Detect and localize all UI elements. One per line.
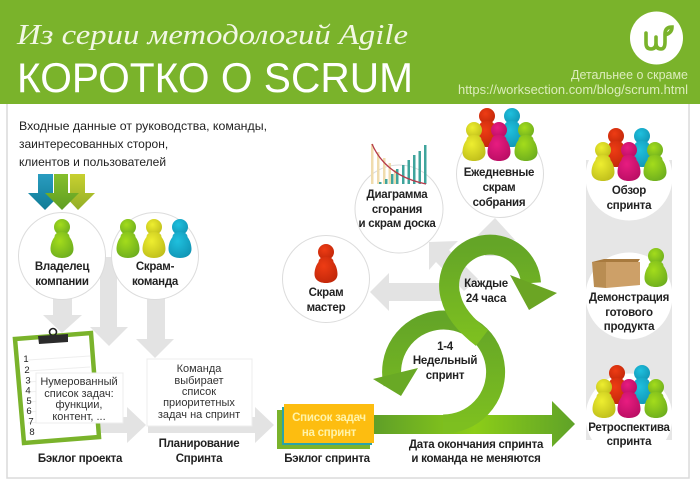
demo label: продукта (604, 321, 655, 333)
daily label: Ежедневные (464, 167, 534, 179)
label: fixed date: Дата окончания спринта (409, 439, 544, 451)
icon: scrum master (314, 244, 338, 283)
owner label: Владелец (35, 261, 89, 273)
intro text: клиентов и пользователей (19, 155, 166, 169)
daily label: скрам (483, 182, 515, 194)
scrum team circle (112, 212, 198, 300)
numbered lines: 1 (23, 354, 29, 365)
scrum master label: Скрам (309, 287, 343, 299)
retro label: спринта (607, 436, 652, 448)
scrum master circle (282, 236, 370, 322)
arrow: team to planning (136, 295, 174, 358)
arrow: lower loop (373, 320, 496, 424)
retro label: Ретроспектива (588, 422, 671, 434)
owner label (35, 261, 89, 288)
icon: team people (116, 219, 192, 258)
backlog note: список задач: (44, 388, 114, 400)
label: every 24 hours (464, 278, 508, 305)
link text (458, 68, 688, 97)
icon: logo (630, 12, 683, 64)
label: every 24 hours: Каждые (464, 278, 508, 290)
review label: Обзор (612, 185, 646, 197)
planning note: приоритетных (163, 397, 235, 409)
icon: demo person (644, 248, 668, 287)
label: sprint planning (159, 438, 239, 465)
burndown circle (355, 144, 443, 253)
sprint review circle (586, 128, 672, 220)
daily scrum circle (456, 108, 544, 218)
burndown label: сгорания (372, 204, 422, 216)
backlog note: Нумерованный (40, 376, 118, 388)
demo label: Демонстрация (589, 292, 669, 304)
team label: команда (132, 276, 179, 288)
label: fixed date (409, 439, 544, 465)
numbered lines (23, 354, 35, 438)
sprint loop arrows (372, 245, 575, 447)
arrow: backlog to planning (100, 407, 146, 443)
label: weekly sprint: Недельный (413, 355, 477, 367)
arrow: owner to backlog (43, 295, 82, 333)
burndown label: и скрам доска (358, 218, 436, 230)
scrum master label: мастер (307, 302, 346, 314)
planning note: список (182, 386, 216, 398)
arrow: upper loop (449, 245, 557, 338)
icon: clip (38, 328, 68, 344)
icon: box (592, 259, 640, 288)
intro text (19, 119, 267, 169)
scrum master label (307, 287, 346, 314)
icon: daily group (462, 108, 538, 161)
icon: review group (592, 128, 666, 181)
chart: burndown (371, 144, 426, 184)
label: every 24 hours: 24 часа (466, 293, 507, 305)
label: sprint backlog: Бэклог спринта (284, 453, 371, 465)
team label (132, 261, 179, 288)
title: main heading: КОРОТКО О SCRUM (17, 54, 413, 101)
label: sprint planning: Спринта (176, 453, 223, 465)
arrow: three input arrows (28, 174, 95, 210)
arrow: team to backlog (90, 257, 128, 346)
backlog note: функции, (56, 399, 102, 411)
label: weekly sprint (413, 341, 477, 382)
planning note (147, 359, 252, 426)
planning note: Команда (177, 363, 222, 375)
intro text: заинтересованных сторон, (19, 137, 168, 151)
demo circle (586, 248, 672, 340)
numbered lines: 6 (26, 406, 32, 417)
review label: спринта (607, 200, 652, 212)
daily label (464, 167, 534, 209)
backlog note: контент, ... (52, 411, 106, 423)
owner circle (18, 212, 106, 300)
planning note: выбирает (174, 375, 224, 387)
demo label: готового (605, 307, 653, 319)
burndown label: Диаграмма (367, 189, 428, 201)
team label: Скрам- (136, 261, 175, 273)
icon: retro group (592, 365, 668, 418)
label: fixed date: и команда не меняются (411, 453, 541, 465)
review label (607, 185, 652, 212)
arrow: to scrum master (370, 273, 450, 311)
backlog note (36, 373, 123, 423)
numbered lines: 5 (26, 396, 32, 407)
sprint backlog text: на спринт (302, 427, 357, 439)
panel: right column band (586, 160, 672, 440)
demo label (589, 292, 669, 333)
icon: owner person (50, 219, 74, 258)
arrow: to daily scrum (473, 218, 515, 256)
burndown label (358, 189, 436, 230)
label: weekly sprint: 1-4 (437, 341, 454, 353)
retrospective circle (586, 365, 672, 460)
numbered lines: 2 (24, 365, 30, 376)
label: project backlog: Бэклог проекта (38, 453, 123, 465)
title: series line: Из серии методологий Agile (16, 20, 408, 51)
numbered lines: 4 (25, 386, 31, 396)
clipboard: project backlog (15, 328, 99, 443)
planning note: задач на спринт (158, 409, 240, 421)
numbered lines: 8 (29, 427, 35, 438)
header banner (0, 0, 700, 104)
intro text: Входные данные от руководства, команды, (19, 119, 267, 133)
arrow: to burndown chart (429, 241, 478, 291)
sprint backlog text: Список задач (292, 412, 366, 424)
sprint backlog text (292, 412, 366, 439)
retro label (588, 422, 671, 448)
owner label: компании (35, 276, 89, 288)
link text: https://worksection.com/blog/scrum.html (458, 83, 688, 97)
arrow: main sprint arrow (372, 401, 575, 447)
daily label: собрания (473, 197, 525, 209)
label: weekly sprint: спринт (426, 370, 465, 382)
link text: Детальнее о скраме (571, 68, 688, 82)
label: sprint planning: Планирование (159, 438, 239, 450)
numbered lines: 7 (28, 416, 34, 428)
sprint backlog stack (277, 404, 374, 449)
arrow: planning to sprint backlog (148, 407, 274, 443)
numbered lines: 3 (25, 376, 31, 386)
